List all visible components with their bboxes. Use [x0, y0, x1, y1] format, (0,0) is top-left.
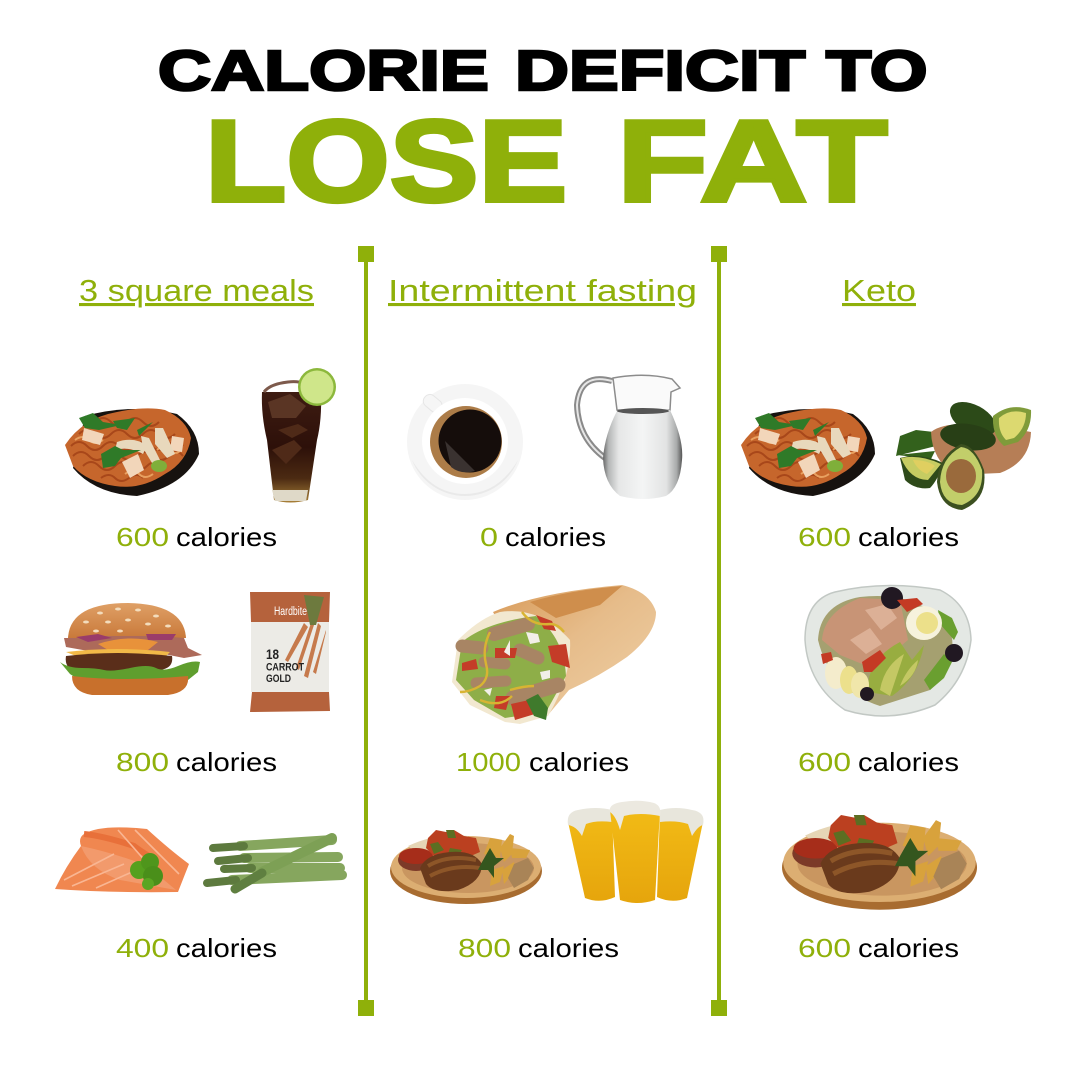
- title: TO: [826, 39, 928, 103]
- label: 800 calories: calories: [518, 933, 619, 963]
- icon: salmon: [55, 827, 189, 892]
- label: 600 calories: calories: [858, 747, 959, 777]
- icon: carrot chips bag: GOLD: [266, 673, 291, 685]
- icon: asparagus: [207, 838, 342, 889]
- left column divider: [358, 246, 374, 1016]
- label: 1000 calories: calories: [529, 747, 629, 777]
- label: 600 calories: [798, 747, 959, 777]
- heading: 3 square meals: 3 square meals: [79, 273, 314, 308]
- label: 400 calories: [116, 933, 277, 963]
- title: FAT: [617, 97, 887, 226]
- heading: Keto: Keto: [842, 273, 916, 308]
- title: LOSE: [205, 97, 567, 226]
- label: 600 calories: 600: [116, 522, 169, 552]
- icon: noodle bowl: [741, 408, 875, 496]
- label: 800 calories: 800: [116, 747, 169, 777]
- title: CALORIE: [158, 38, 489, 102]
- label: 600 calories: [116, 522, 277, 552]
- label: 0 calories: 0: [480, 522, 498, 552]
- icon: steak plate: [782, 815, 977, 910]
- icon: wrap: [452, 585, 656, 724]
- panel: Intermittent fasting: [388, 273, 704, 963]
- right column divider: [711, 246, 727, 1016]
- icon: carrot chips bag: CARROT: [266, 662, 304, 674]
- label: 600 calories: 600: [798, 933, 851, 963]
- icon: coffee cup: [407, 384, 523, 500]
- icon: avocados in bowl: [896, 395, 1031, 510]
- label: 800 calories: [116, 747, 277, 777]
- icon: burger: [60, 603, 202, 695]
- label: 800 calories: [458, 933, 619, 963]
- icon: beer glasses: [568, 801, 704, 903]
- icon: water pitcher: [577, 375, 682, 499]
- icon: cola glass: [262, 368, 336, 502]
- panel: 3 square meals: [55, 273, 342, 963]
- icon: salad bowl: [805, 585, 971, 716]
- label: 0 calories: calories: [505, 522, 606, 552]
- label: 400 calories: 400: [116, 933, 169, 963]
- label: 1000 calories: 1000: [456, 747, 521, 777]
- icon: carrot chips bag: 18: [266, 646, 279, 662]
- label: 600 calories: calories: [858, 522, 959, 552]
- icon: carrot chips bag: [250, 592, 330, 712]
- icon: carrot chips bag: Hardbite: [274, 606, 307, 618]
- label: 1000 calories: [456, 747, 629, 777]
- label: 800 calories: calories: [176, 747, 277, 777]
- label: 600 calories: [798, 933, 959, 963]
- label: 600 calories: [798, 522, 959, 552]
- icon: noodle bowl: [65, 408, 199, 496]
- label: 400 calories: calories: [176, 933, 277, 963]
- label: 600 calories: calories: [858, 933, 959, 963]
- heading: Intermittent fasting: Intermittent fasting: [388, 273, 697, 308]
- panel: Keto: [741, 273, 1031, 963]
- label: 600 calories: calories: [176, 522, 277, 552]
- label: 600 calories: 600: [798, 522, 851, 552]
- title: [158, 38, 928, 226]
- label: 800 calories: 800: [458, 933, 511, 963]
- title: DEFICIT: [515, 39, 805, 103]
- label: 600 calories: 600: [798, 747, 851, 777]
- icon: steak plate: [390, 830, 542, 904]
